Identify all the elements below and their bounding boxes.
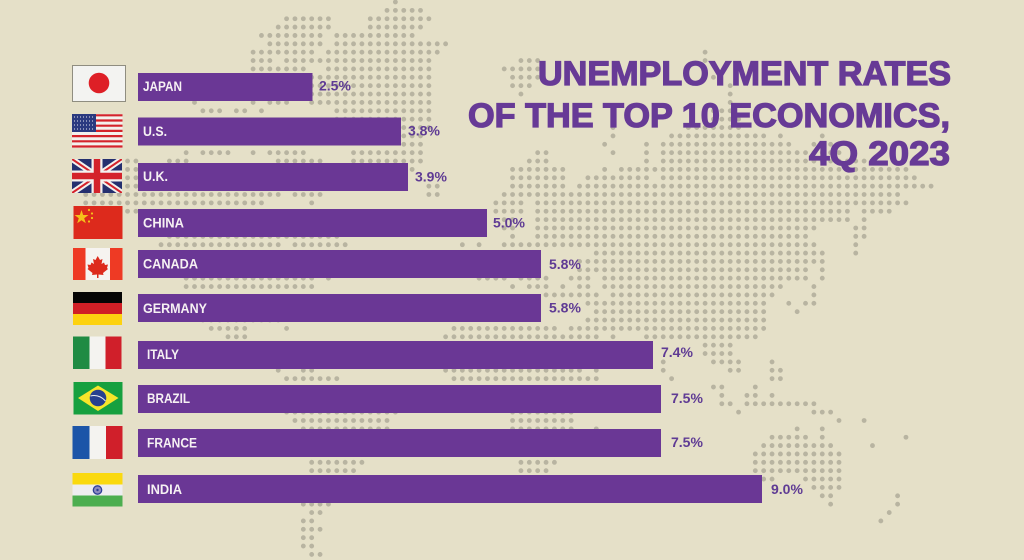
row: U.K. bbox=[72, 159, 447, 193]
icon: France flag bbox=[72, 426, 122, 459]
icon: Canada flag bbox=[73, 248, 122, 280]
bar: Japan 2.5% bbox=[138, 73, 312, 101]
icon: Japan flag bbox=[72, 66, 126, 102]
row: Germany bbox=[73, 292, 581, 325]
label: India: INDIA bbox=[147, 482, 182, 497]
value: India: 9.0% bbox=[771, 481, 803, 497]
row: Brazil bbox=[74, 382, 703, 414]
title: OF THE TOP 10 ECONOMICS, bbox=[468, 97, 950, 135]
label: Germany: GERMANY bbox=[143, 301, 207, 316]
label: U.S.: U.S. bbox=[143, 124, 167, 139]
row: India bbox=[72, 473, 803, 506]
icon: Germany flag bbox=[73, 292, 122, 325]
label: Italy: ITALY bbox=[147, 347, 179, 362]
value: Canada: 5.8% bbox=[549, 256, 581, 272]
row: U.S. bbox=[72, 114, 440, 148]
value: Italy: 7.4% bbox=[661, 344, 693, 360]
value: China: 5.0% bbox=[493, 214, 525, 230]
label: Canada: CANADA bbox=[143, 256, 198, 272]
title bbox=[468, 55, 951, 173]
bar: U.S. 3.8% bbox=[138, 118, 401, 146]
icon: Italy flag bbox=[73, 336, 122, 369]
value: France: 7.5% bbox=[671, 434, 703, 450]
row: Canada bbox=[73, 248, 581, 280]
title: UNEMPLOYMENT RATES bbox=[538, 55, 951, 93]
icon: China flag bbox=[74, 206, 122, 239]
icon: U.K. flag bbox=[72, 159, 122, 193]
value: U.K.: 3.9% bbox=[415, 168, 447, 184]
title: 4Q 2023 bbox=[809, 135, 950, 173]
value: Brazil: 7.5% bbox=[671, 390, 703, 406]
row: Italy bbox=[73, 336, 693, 369]
label: China: CHINA bbox=[143, 216, 184, 230]
label: France: FRANCE bbox=[147, 436, 197, 450]
label: U.K.: U.K. bbox=[143, 169, 168, 184]
label: Brazil: BRAZIL bbox=[147, 391, 190, 406]
icon: Brazil flag bbox=[74, 382, 122, 414]
value: U.S.: 3.8% bbox=[408, 122, 440, 138]
bar: Brazil 7.5% bbox=[138, 385, 661, 413]
icon: U.S. flag bbox=[72, 114, 122, 148]
bar: Canada 5.8% bbox=[138, 250, 541, 278]
bar: China 5.0% bbox=[138, 209, 487, 237]
bar: France 7.5% bbox=[138, 429, 661, 457]
bar: Germany 5.8% bbox=[138, 294, 541, 322]
bar: Italy 7.4% bbox=[138, 341, 653, 369]
value: Japan: 2.5% bbox=[319, 78, 351, 94]
row: China bbox=[74, 206, 525, 239]
row: Japan bbox=[72, 66, 351, 102]
row: France bbox=[72, 426, 703, 459]
icon: India flag bbox=[72, 473, 122, 506]
label: Japan: JAPAN bbox=[143, 79, 182, 94]
bar: India 9.0% bbox=[138, 475, 762, 503]
bar: U.K. 3.9% bbox=[138, 163, 408, 191]
value: Germany: 5.8% bbox=[549, 300, 581, 316]
